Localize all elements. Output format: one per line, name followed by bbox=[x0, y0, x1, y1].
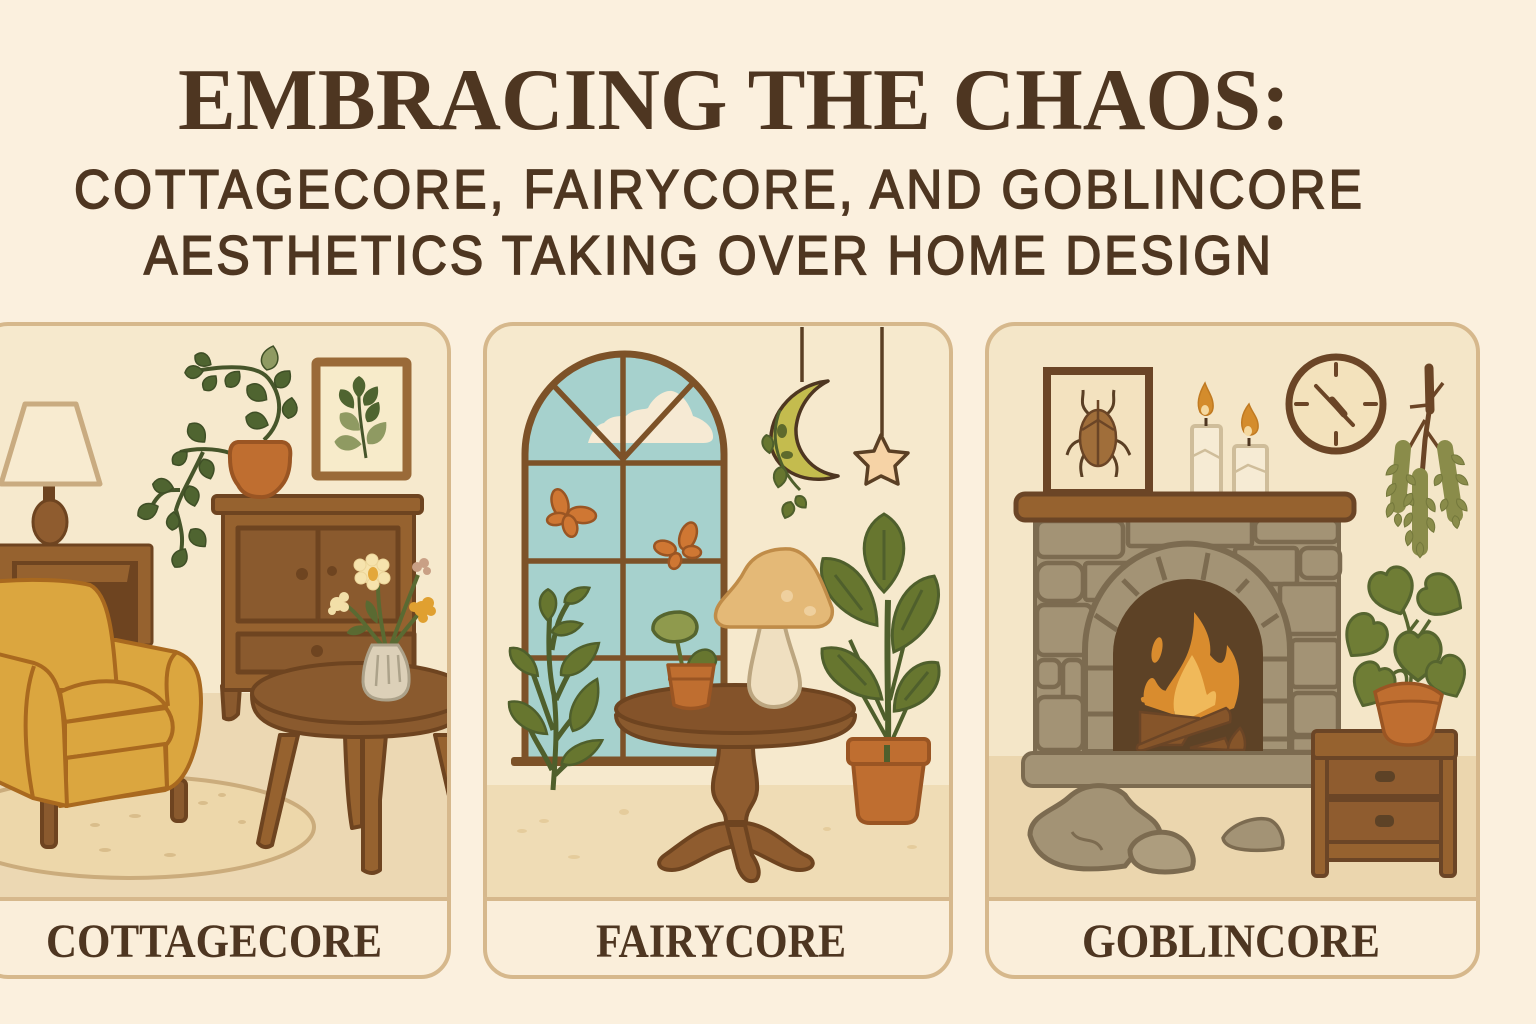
moon with vine bbox=[761, 327, 838, 520]
vase with flowers bbox=[328, 554, 436, 700]
mushroom lamp bbox=[716, 549, 832, 707]
hanging star bbox=[855, 327, 908, 484]
dried herbs bbox=[1384, 367, 1470, 558]
armchair bbox=[0, 580, 201, 847]
subtitle: AESTHETICS TAKING OVER HOME DESIGN bbox=[144, 225, 1271, 287]
panel: cottagecore bbox=[0, 324, 468, 977]
wall clock bbox=[1289, 357, 1383, 451]
potted floor plant bbox=[820, 512, 941, 825]
hearth bbox=[1023, 753, 1343, 786]
label: cottagecore: COTTAGECORE bbox=[46, 915, 382, 968]
pedestal table bbox=[616, 685, 855, 881]
side cabinet bbox=[0, 545, 152, 646]
arched window bbox=[511, 354, 725, 766]
small potted plant bbox=[653, 612, 716, 708]
label: goblincore: GOBLINCORE bbox=[1082, 915, 1380, 968]
round table bbox=[252, 663, 468, 873]
title: EMBRACING THE CHAOS: bbox=[178, 52, 1290, 149]
lamp bbox=[1, 404, 100, 544]
stone fireplace bbox=[1035, 518, 1340, 754]
framed beetle bbox=[1047, 371, 1149, 493]
mantel bbox=[1016, 494, 1354, 520]
butterflies bbox=[546, 487, 701, 571]
subtitle: COTTAGECORE, FAIRYCORE, AND GOBLINCORE bbox=[74, 159, 1362, 221]
label: fairycore: FAIRYCORE bbox=[596, 915, 846, 968]
candles bbox=[1192, 383, 1267, 494]
framed botanical print bbox=[316, 362, 407, 476]
potted vine bbox=[135, 344, 299, 571]
fire and logs bbox=[1137, 612, 1245, 750]
panel: goblincore bbox=[987, 324, 1478, 977]
rocks bbox=[1030, 786, 1283, 872]
left window plant bbox=[503, 582, 607, 790]
rug bbox=[0, 776, 314, 878]
panel: fairycore bbox=[485, 324, 951, 977]
dresser bbox=[213, 496, 422, 719]
subtitle bbox=[74, 159, 1362, 287]
potted pothos bbox=[1345, 565, 1466, 746]
nightstand bbox=[1313, 731, 1456, 876]
